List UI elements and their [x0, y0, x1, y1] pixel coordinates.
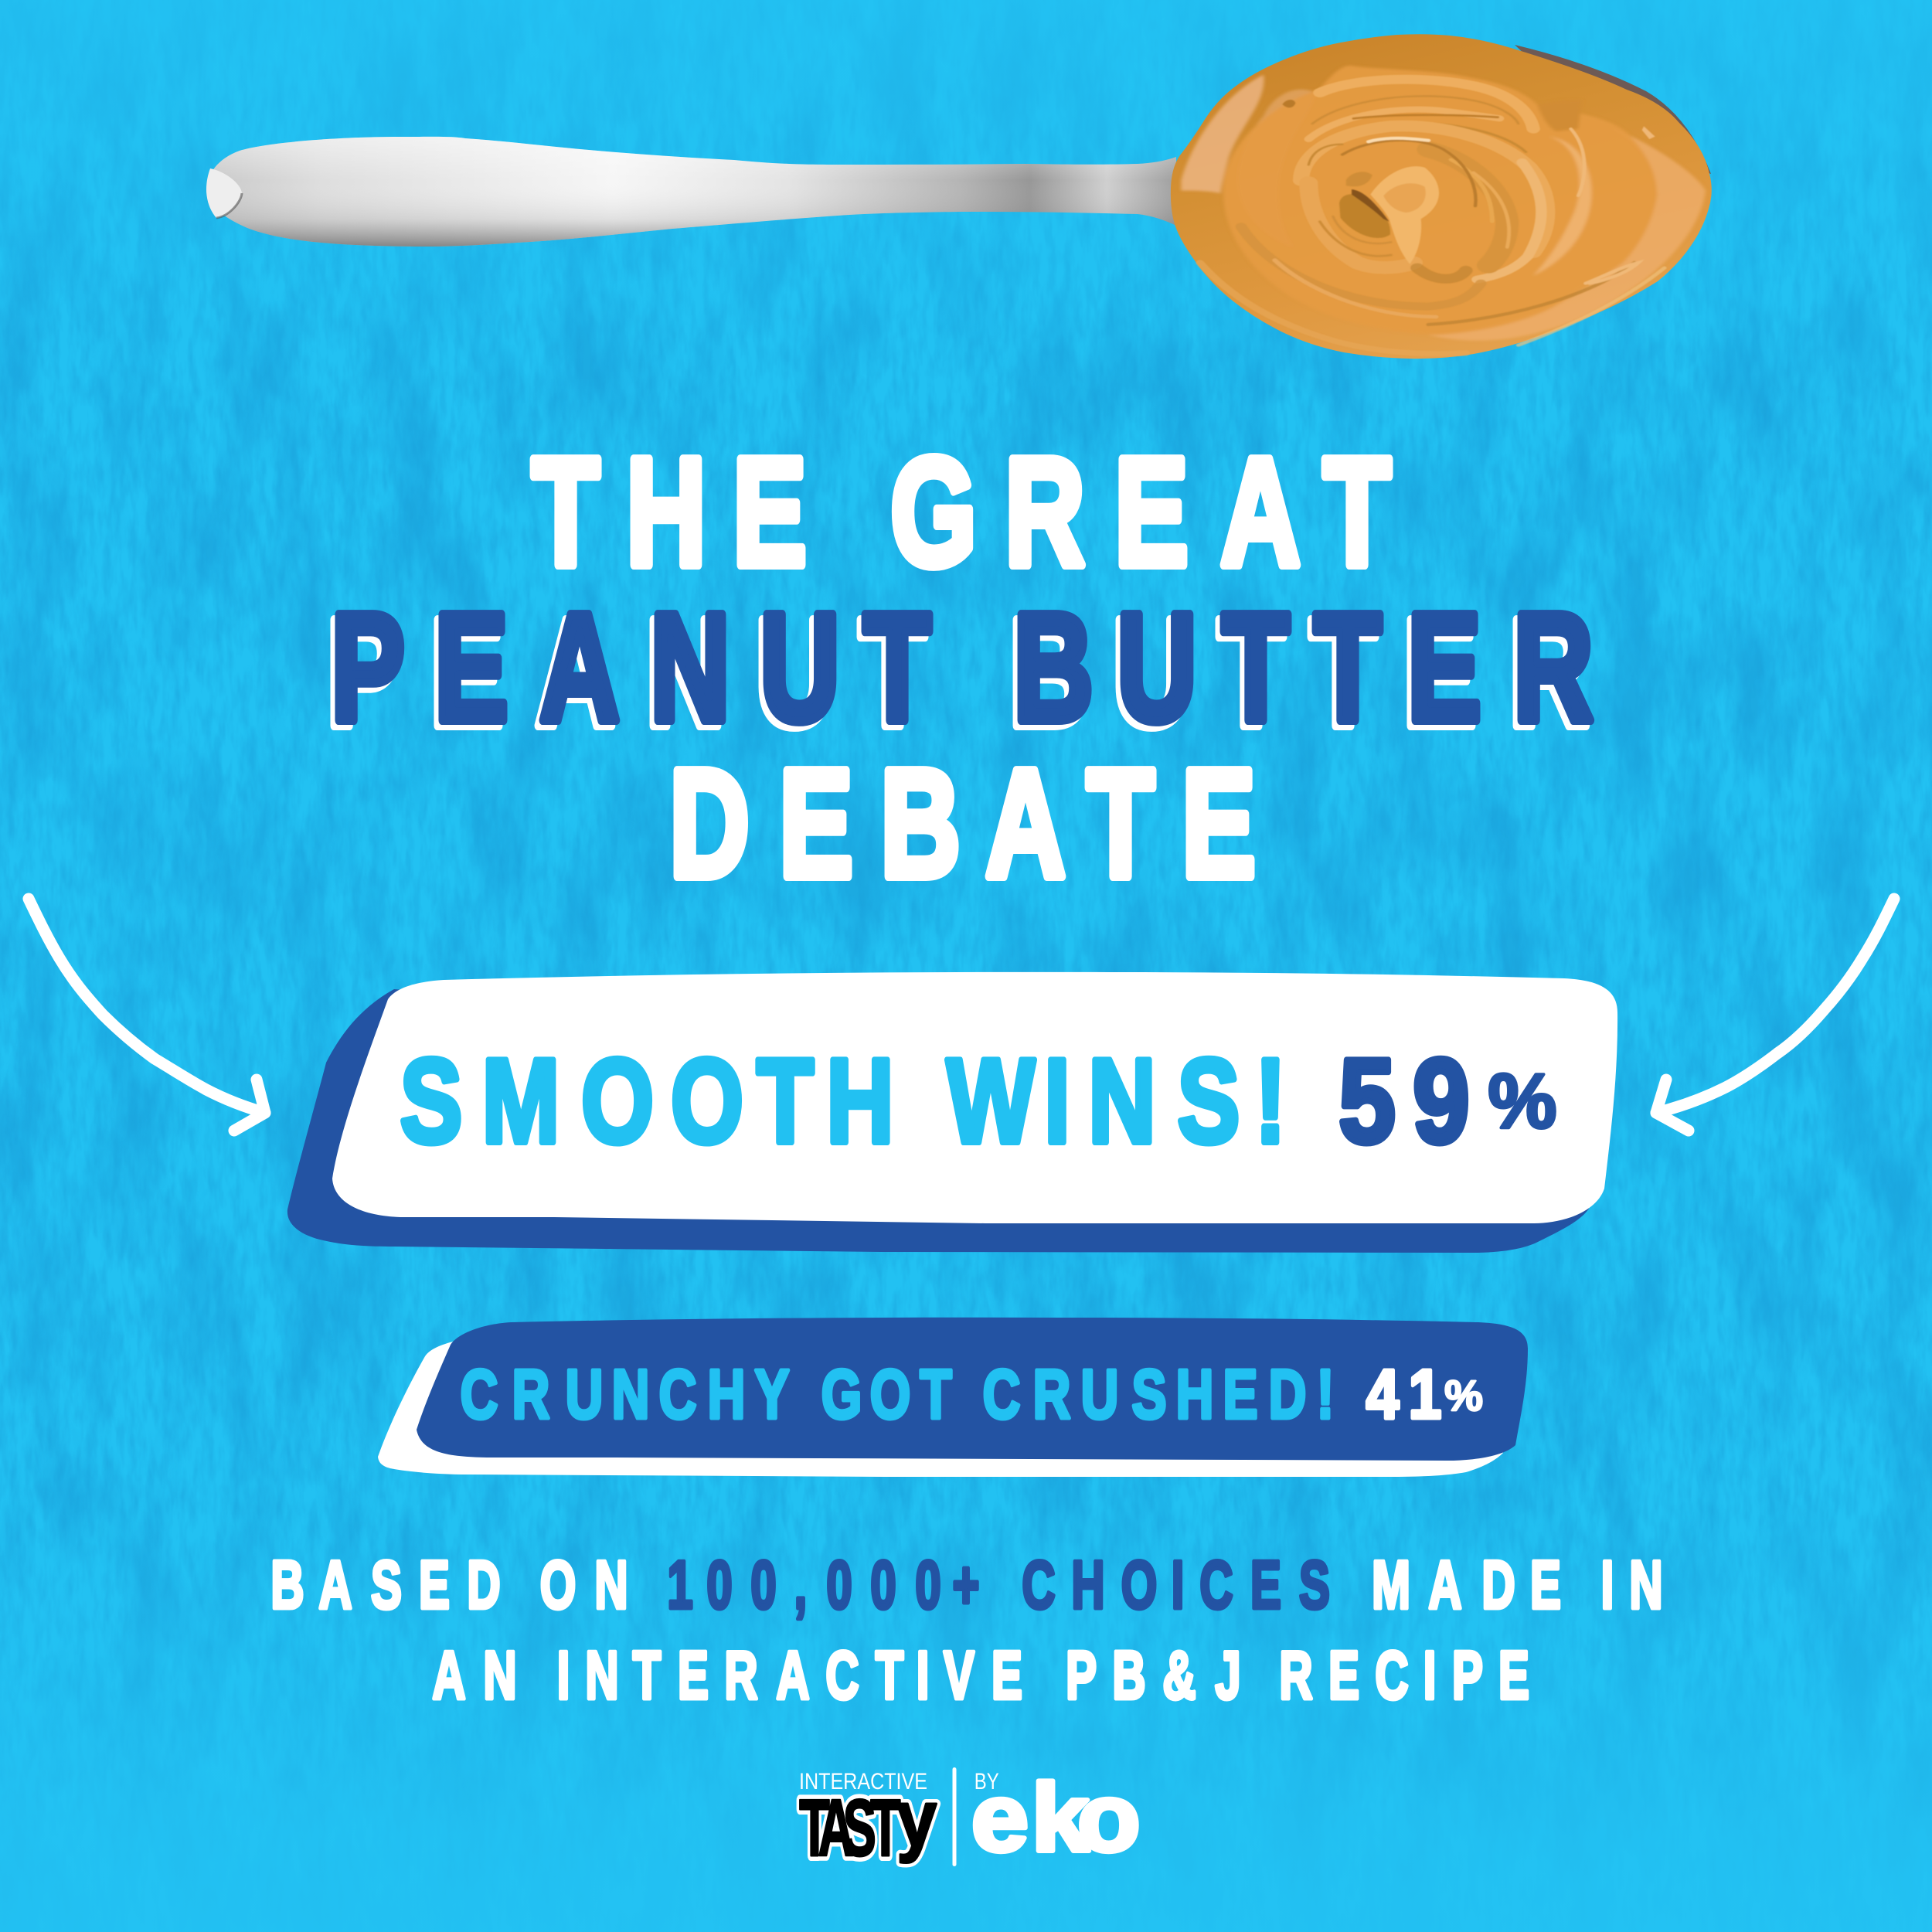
logo divider — [952, 1767, 957, 1866]
title line: PEANUT BUTTER with white offset shadow: PEANUT BUTTER — [331, 581, 1594, 753]
panel shadow — [287, 989, 1592, 1253]
peanut butter swirl — [1181, 66, 1706, 354]
title line: DEBATE: DEBATE — [669, 737, 1256, 909]
panel: crunchy got crushed — [378, 1318, 1528, 1477]
lower bands — [1241, 226, 1481, 307]
outer ridges — [1320, 80, 1533, 129]
bright fold — [1370, 166, 1439, 264]
panel: smooth wins — [287, 972, 1617, 1253]
title — [326, 426, 1594, 909]
logo: interactive tasty: TAST — [799, 1784, 900, 1873]
glossy left rim — [1181, 75, 1264, 193]
stat: 59 percent: 59 — [1338, 1035, 1470, 1168]
panel body — [332, 972, 1617, 1223]
stat: 59 percent — [1338, 1035, 1556, 1168]
logo: interactive tasty: INTERACTIVE — [799, 1769, 927, 1794]
spoon with peanut butter — [206, 34, 1712, 359]
line one: 100,000+ CHOICES — [667, 1546, 1330, 1623]
stat: 59 percent: % — [1488, 1058, 1556, 1145]
headline: crunchy got crushed: CRUNCHY GOT CRUSHED! — [461, 1355, 1334, 1433]
line two: AN INTERACTIVE PB&J RECIPE — [432, 1637, 1529, 1713]
arrow: left pointing to smooth panel — [29, 899, 265, 1131]
peanut butter bowl — [1171, 34, 1712, 359]
stat: 41 percent: 41 — [1366, 1355, 1441, 1433]
title line: THE GREAT: THE GREAT — [532, 426, 1391, 597]
title line: PEANUT BUTTER with white offset shadow: PEANUT BUTTER — [326, 587, 1589, 758]
inner whorl — [1342, 141, 1475, 206]
logo: by eko: BY — [975, 1767, 999, 1794]
logo: interactive tasty — [799, 1769, 937, 1873]
lower-right lighter lobe — [1428, 118, 1706, 341]
logo lockup — [799, 1764, 1141, 1873]
swirl centre pit — [1339, 194, 1390, 238]
logo: interactive tasty: y — [896, 1773, 937, 1863]
spoon handle — [206, 137, 1176, 247]
logo: by eko: eko — [971, 1764, 1141, 1872]
panel shadow — [378, 1341, 1503, 1477]
stat: 41 percent: % — [1444, 1371, 1483, 1420]
swirl mound — [1223, 66, 1657, 335]
line one — [270, 1546, 1663, 1623]
arrow: right pointing to smooth panel — [1656, 899, 1894, 1131]
line one: BASED ON — [270, 1546, 628, 1623]
text block: based on 100,000+ choices — [270, 1546, 1663, 1713]
headline: smooth wins: SMOOTH WINS! — [400, 1035, 1286, 1168]
panel body — [417, 1318, 1528, 1461]
line one: MADE IN — [1372, 1546, 1663, 1623]
logo: interactive tasty: TAST — [799, 1784, 900, 1873]
logo: interactive tasty: y — [896, 1773, 937, 1863]
handle tip dimple — [206, 168, 242, 218]
stat: 41 percent — [1366, 1355, 1483, 1433]
